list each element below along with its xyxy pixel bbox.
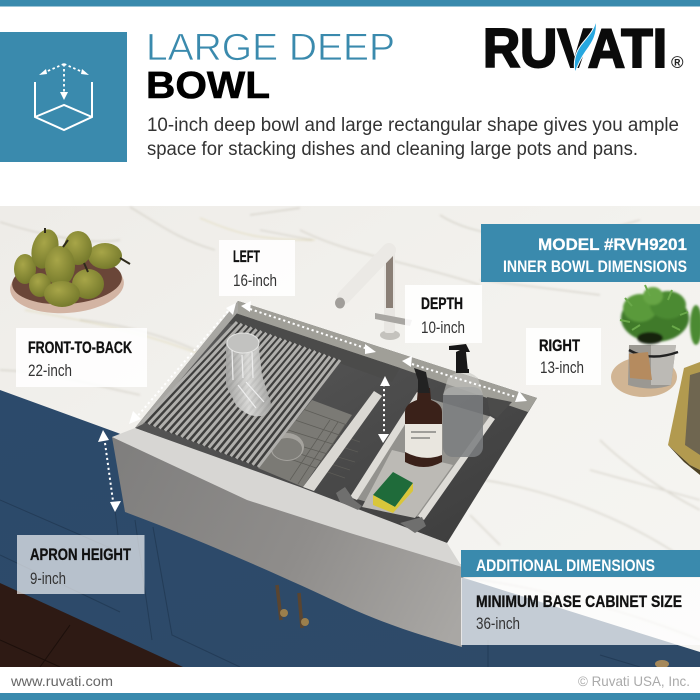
label: front-to-back: FRONT-TO-BACK: [28, 338, 133, 357]
label: right: 13-inch: [540, 358, 584, 377]
label: depth: [405, 285, 482, 343]
panel: model banner: [481, 224, 700, 282]
photo: kitchen scene: [0, 206, 700, 668]
panel: additional dimensions: ADDITIONAL DIMENSIONS: [476, 556, 655, 575]
label: apron height: APRON HEIGHT: [30, 545, 131, 564]
title: LARGE DEEP: [146, 27, 395, 69]
cabinets: [0, 380, 700, 668]
glass cups: [226, 333, 271, 416]
title: BOWL: [146, 65, 270, 107]
soap bottles: [405, 344, 483, 467]
panel: additional dimensions: [461, 550, 700, 645]
potted plant: [611, 285, 700, 397]
drying rack: [143, 322, 340, 467]
dimension arrows: [105, 309, 516, 501]
label: left: LEFT: [233, 247, 260, 266]
sink apron lip: [112, 428, 462, 567]
bottom teal bar: [0, 693, 700, 700]
icon: bowl dimensions: [0, 32, 127, 162]
label: depth: 10-inch: [421, 318, 465, 337]
sink grid floor: [258, 400, 352, 487]
panel: model banner: MODEL #RVH9201: [538, 236, 687, 254]
faucet: [335, 245, 412, 340]
description text: 10-inch deep bowl and large rectangular shape gives you ample: [147, 115, 679, 136]
label: left: [219, 240, 295, 296]
title: [146, 27, 395, 107]
label: right: RIGHT: [539, 336, 580, 355]
label: apron height: 9-inch: [30, 569, 66, 588]
footer strip: © Ruvati USA, Inc.: [578, 673, 690, 689]
marble countertop: [0, 206, 700, 652]
label: left: 16-inch: [233, 271, 277, 290]
divider strip: [303, 391, 382, 491]
pear bowl: [8, 226, 130, 317]
label: apron height: [17, 535, 144, 594]
top teal bar: [0, 0, 700, 6]
label: front-to-back: [16, 328, 147, 387]
colander insert: [336, 392, 512, 533]
footer strip: www.ruvati.com: [10, 673, 113, 689]
label: right: [526, 328, 601, 385]
sink basin and rim: [135, 301, 537, 543]
arrowheads: [98, 301, 527, 512]
description text: [147, 115, 679, 160]
panel: additional dimensions: 36-inch: [476, 614, 520, 633]
sink apron: [112, 437, 462, 647]
logo: Ruvati: ®: [671, 53, 684, 72]
footer strip: [0, 667, 700, 693]
label: front-to-back: 22-inch: [28, 361, 72, 380]
sponge: [373, 472, 413, 513]
oil bottle: [668, 362, 700, 475]
logo: Ruvati: RUVATI: [483, 17, 667, 79]
description text: space for stacking dishes and cleaning large pots and pans.: [147, 139, 638, 160]
label: depth: DEPTH: [421, 294, 463, 313]
